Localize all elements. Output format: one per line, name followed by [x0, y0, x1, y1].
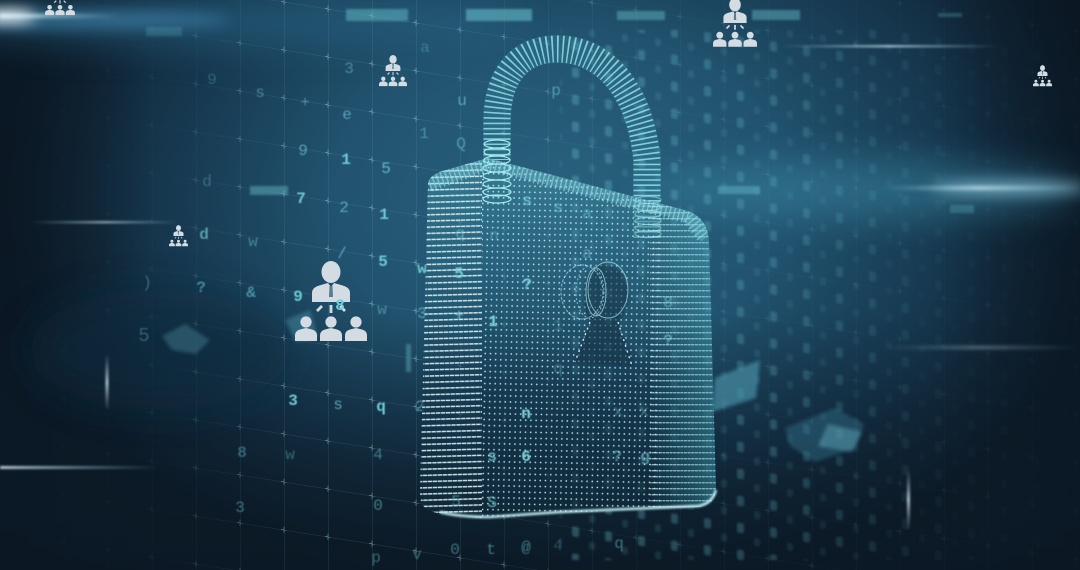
scattered data characters: 3 [288, 392, 298, 410]
scattered data characters: + [300, 94, 310, 112]
scattered data characters: 9 [207, 71, 217, 89]
scattered data characters: p [371, 549, 381, 567]
scattered data characters: e [342, 106, 352, 124]
scattered data characters: 0 [450, 541, 460, 559]
scattered data characters: q [376, 398, 386, 416]
scattered data characters: 2 [339, 199, 349, 217]
scattered data characters: 1 [341, 151, 351, 169]
top data bars [146, 9, 974, 372]
lock body [420, 158, 716, 518]
lock body texture [415, 150, 720, 520]
characters inside lock: S [487, 494, 497, 512]
scattered data characters: 1 [419, 125, 429, 143]
icon: org chart top centre left [379, 55, 407, 86]
characters inside lock: s [522, 192, 532, 210]
characters inside lock: x [613, 403, 623, 421]
lock bottom highlight [440, 490, 716, 517]
characters inside lock: a [582, 205, 592, 223]
icon: org chart small left [169, 225, 188, 246]
scattered data characters: Q [456, 135, 466, 153]
characters inside lock: q [455, 225, 465, 243]
characters inside lock [451, 192, 673, 512]
scattered data characters: 5 [138, 325, 150, 347]
scattered data characters: 3 [417, 305, 427, 323]
characters inside lock: 1 [553, 317, 563, 335]
scattered data characters: s [255, 84, 265, 102]
keyhole [561, 262, 634, 366]
scattered data characters: 5 [381, 160, 391, 178]
scattered data characters: 7 [296, 190, 306, 208]
scattered data characters: 8 [237, 444, 247, 462]
scattered data characters: v [412, 546, 422, 564]
scattered data characters: 4 [373, 446, 383, 464]
scattered data characters: u [457, 92, 467, 110]
characters inside lock: + [454, 307, 464, 325]
scattered data characters: 3 [235, 499, 245, 517]
floating debris shapes [162, 310, 864, 462]
characters inside lock: a [582, 245, 592, 263]
scattered data characters: 1 [379, 206, 389, 224]
characters inside lock: ? [663, 332, 673, 350]
scattered data characters: 9 [293, 288, 303, 306]
characters inside lock: 5 [454, 265, 464, 283]
scattered data characters: 2 [415, 398, 425, 416]
characters inside lock: ? [612, 448, 622, 466]
scattered data characters: 5 [378, 253, 388, 271]
scattered data characters [138, 39, 624, 567]
shackle back [497, 49, 647, 238]
blurred data matrix [560, 30, 940, 561]
characters inside lock: ? [522, 276, 532, 294]
scattered data characters: 3 [344, 60, 354, 78]
scattered data characters: d [202, 173, 212, 191]
scattered data characters: w [417, 260, 427, 278]
shackle front rings [483, 140, 661, 238]
scattered data characters: w [248, 233, 258, 251]
scattered data characters: ? [196, 279, 206, 297]
characters inside lock: n [489, 227, 499, 245]
scattered data characters: s [333, 396, 343, 414]
characters inside lock: 8 [663, 294, 673, 312]
scattered data characters: p [551, 82, 561, 100]
scattered data characters: & [246, 284, 256, 302]
icon: org chart large [295, 261, 367, 341]
scattered data characters: a [420, 39, 430, 57]
scattered data characters: t [486, 541, 496, 559]
scattered data characters: ) [142, 274, 152, 292]
scattered data characters: 0 [373, 497, 383, 515]
scattered data characters: w [377, 301, 387, 319]
scattered data characters: 9 [298, 142, 308, 160]
scattered data characters: q [614, 535, 624, 553]
characters inside lock: 1 [488, 313, 498, 331]
icon: org chart far right [1033, 65, 1052, 86]
scattered data characters: 4 [553, 537, 563, 555]
characters inside lock: n [521, 405, 531, 423]
scattered data characters: d [199, 226, 209, 244]
padlock [415, 49, 720, 520]
scattered data characters: @ [521, 539, 531, 557]
characters inside lock: s [487, 448, 497, 466]
characters inside lock: 5 [451, 493, 461, 511]
overlay digit on large org chart: 8 [335, 297, 345, 315]
characters inside lock: g [640, 448, 650, 466]
characters inside lock: 6 [521, 448, 531, 466]
scattered data characters: w [285, 446, 295, 464]
characters inside lock: q [553, 360, 563, 378]
characters inside lock: s [553, 199, 563, 217]
icon: org chart top right [713, 0, 757, 47]
icon: org chart top left [45, 0, 75, 15]
characters inside lock: x [639, 403, 649, 421]
scattered data characters: / [337, 245, 347, 263]
